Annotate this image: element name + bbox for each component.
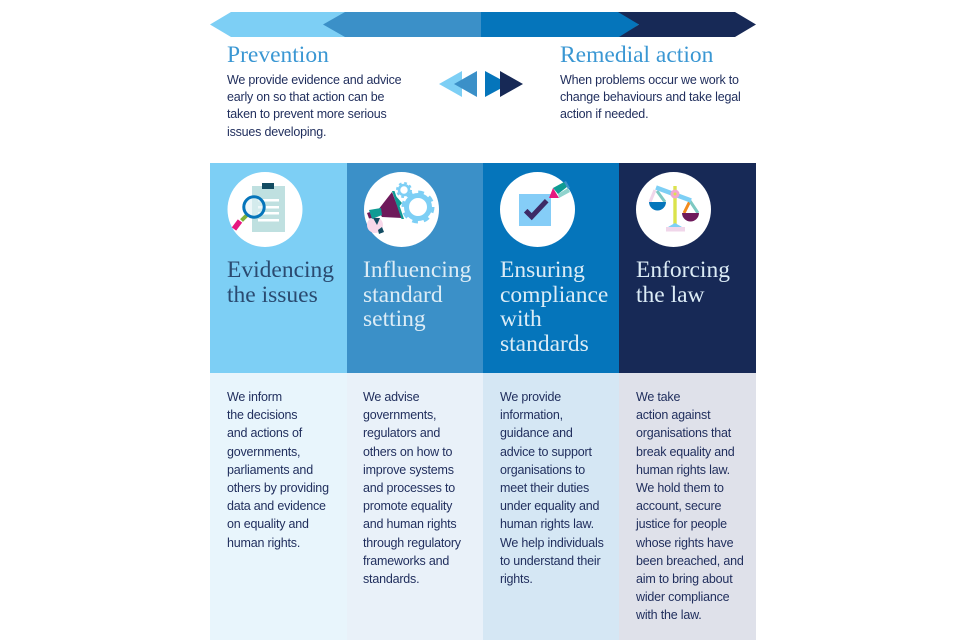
body text: meet their duties [500,481,589,495]
body text: account, secure [636,499,721,513]
body text: whose rights have [636,536,733,550]
text: prevention [227,73,401,139]
body text [636,390,744,622]
heading: Evidencing [227,257,334,283]
body text: information, [500,408,563,422]
header band [347,163,483,373]
heading: the law [636,282,705,308]
header band [619,163,756,373]
icon: megaphone and gears [364,172,439,247]
text: prevention: We provide evidence and advice [227,73,401,87]
text: remedial action: action if needed. [560,107,648,121]
heading: Enforcing [636,257,730,283]
panel: enforcing the law [619,163,756,640]
body text: with the law. [636,608,702,622]
icon: scales of justice [636,172,711,247]
body text: action against [636,408,710,422]
body text: improve systems [363,463,454,477]
panel: ensuring compliance [483,163,619,640]
icon: clipboard and magnifying glass [228,172,302,247]
body text: aim to bring about [636,572,732,586]
heading: compliance [500,282,608,308]
body text [363,390,461,586]
body text: justice for people [636,517,727,531]
body text: rights. [500,572,533,586]
body text: wider compliance [636,590,729,604]
body text: We inform [227,390,282,404]
heading: Ensuring [500,257,585,283]
panel: remedial action [560,42,741,121]
body text: guidance and [500,426,573,440]
panel: evidencing the issues [210,163,347,640]
body text: the decisions [227,408,297,422]
panel: influencing standard setting [347,163,483,640]
text: prevention: issues developing. [227,125,326,139]
panel: prevention [227,42,401,139]
body text: We advise [363,390,419,404]
body text: human rights law. [500,517,594,531]
body text: human rights. [227,536,300,550]
body text: data and evidence [227,499,326,513]
body text: parliaments and [227,463,313,477]
text: remedial action [560,73,741,121]
icon: small opposing arrows [439,71,523,97]
heading [227,257,334,308]
heading [636,257,730,308]
body text: We help individuals [500,536,604,550]
body text: governments, [227,445,300,459]
body text [500,390,604,586]
body text: organisations that [636,426,731,440]
heading [363,257,471,332]
heading: prevention: Prevention [227,42,329,68]
heading: with [500,306,542,332]
body text: through regulatory [363,536,461,550]
heading: Influencing [363,257,471,283]
body text: to understand their [500,554,600,568]
text: prevention: taken to prevent more serious [227,107,387,121]
top double-headed arrow [210,12,756,37]
icon: checkbox and pen [500,172,575,247]
body text: We hold them to [636,481,724,495]
body text: others on how to [363,445,452,459]
heading [500,257,608,356]
body text: on equality and [227,517,309,531]
body text: We provide [500,390,561,404]
header band [483,163,619,373]
body text: governments, [363,408,436,422]
body text: regulators and [363,426,440,440]
body text: promote equality [363,499,452,513]
body text: been breached, and [636,554,744,568]
heading: remedial action: Remedial action [560,42,713,68]
text: remedial action: change behaviours and take legal [560,90,741,104]
body text: and actions of [227,426,302,440]
heading: standard [363,282,443,308]
body text: break equality and [636,445,735,459]
body text: standards. [363,572,419,586]
heading: setting [363,306,426,332]
body text: advice to support [500,445,592,459]
body text: We take [636,390,680,404]
body text: and human rights [363,517,456,531]
body text: others by providing [227,481,329,495]
body text: human rights law. [636,463,730,477]
text: remedial action: When problems occur we work to [560,73,739,87]
body text: frameworks and [363,554,449,568]
heading: the issues [227,282,318,308]
text: prevention: early on so that action can be [227,90,384,104]
body text: under equality and [500,499,599,513]
body text: and processes to [363,481,455,495]
body text [227,390,329,550]
body text: organisations to [500,463,585,477]
heading: standards [500,330,589,356]
header band [210,163,347,373]
